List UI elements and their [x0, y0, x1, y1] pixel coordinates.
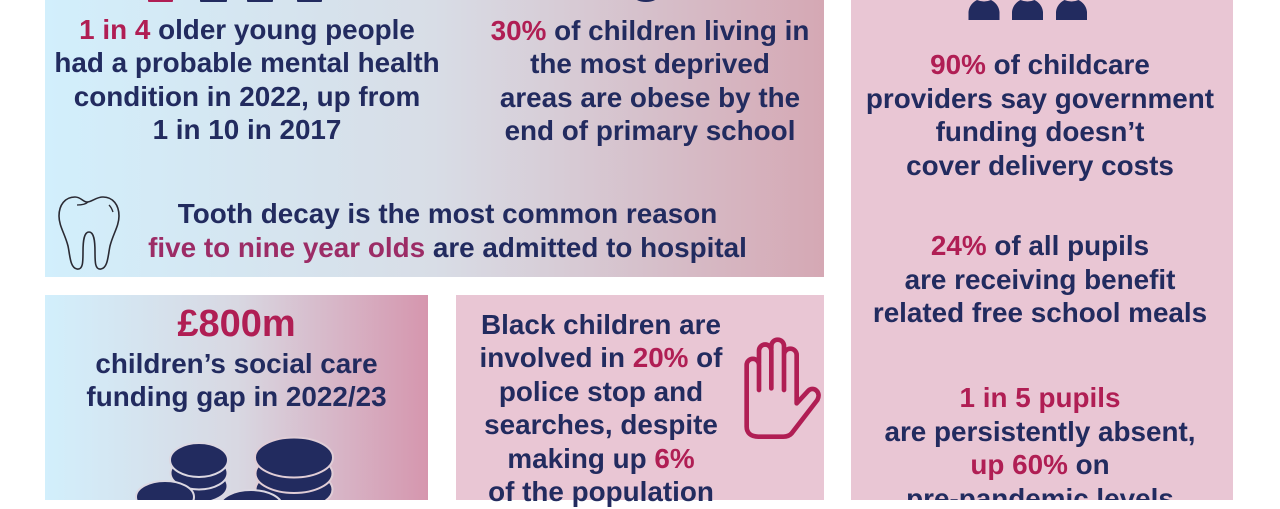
text: free school meals statistic: related free school meals — [873, 297, 1207, 328]
text: mental health statistic: 1 in 4 older young people — [79, 14, 415, 44]
text: childcare funding statistic: 90% of childcare — [930, 49, 1150, 80]
text: mental health statistic: had a probable mental health — [54, 47, 440, 78]
panel: health — [45, 0, 824, 277]
text: stop and search statistic: of the population — [488, 476, 714, 507]
text: stop and search statistic: Black children are — [481, 308, 721, 340]
text: obesity statistic: areas are obese by the — [500, 82, 800, 112]
text: obesity statistic: 30% of children living in — [491, 14, 809, 46]
icon: obesity icon, cropped — [637, 0, 655, 2]
text: stop and search statistic: making up 6% — [507, 442, 695, 474]
text: childcare funding statistic — [866, 49, 1214, 181]
text: funding gap description — [86, 348, 387, 412]
text: funding gap description: children’s social care — [95, 348, 378, 379]
text: stop and search statistic: involved in 20% of — [480, 342, 722, 373]
text: childcare funding statistic: providers say government — [866, 82, 1214, 114]
text: obesity statistic — [491, 14, 809, 146]
text: tooth decay statistic: Tooth decay is the most common reason — [178, 198, 717, 229]
panel: police stop and search — [456, 295, 824, 500]
icon: three childcare figures, cropped — [968, 0, 1087, 20]
text: obesity statistic: end of primary school — [505, 115, 795, 146]
icon: raised hand — [744, 337, 821, 439]
text: mental health statistic: condition in 2022, up from — [74, 80, 420, 112]
text: absence statistic: 1 in 5 pupils — [960, 382, 1120, 413]
text: free school meals statistic — [873, 230, 1207, 328]
text: childcare funding statistic: cover delivery costs — [906, 150, 1174, 180]
icon: row of young people, cropped — [148, 0, 322, 2]
text: free school meals statistic: are receiving benefit — [905, 264, 1175, 294]
text: mental health statistic — [54, 14, 440, 145]
text: tooth decay statistic: five to nine year olds are admitted to hospital — [148, 232, 747, 262]
panel: social care funding — [45, 295, 428, 500]
text: stop and search statistic: police stop and — [499, 376, 703, 406]
panel: education — [851, 0, 1233, 500]
text: stop and search statistic: searches, despite — [484, 409, 718, 440]
text: absence statistic: up 60% on — [970, 449, 1110, 480]
text: funding gap description: funding gap in 2022/23 — [86, 381, 387, 412]
icon: coin stacks — [135, 436, 334, 500]
text: absence statistic — [884, 382, 1196, 500]
text: childcare funding statistic: funding doesn’t — [936, 116, 1144, 147]
text: absence statistic: are persistently absent, — [884, 416, 1196, 446]
text: tooth decay statistic — [148, 198, 747, 263]
text: obesity statistic: the most deprived — [530, 48, 770, 79]
icon: tooth — [58, 196, 120, 270]
text: stop and search statistic — [480, 308, 722, 507]
text: funding amount: £800m — [177, 303, 296, 345]
text: mental health statistic: 1 in 10 in 2017 — [153, 114, 341, 145]
text: free school meals statistic: 24% of all pupils — [931, 230, 1149, 261]
